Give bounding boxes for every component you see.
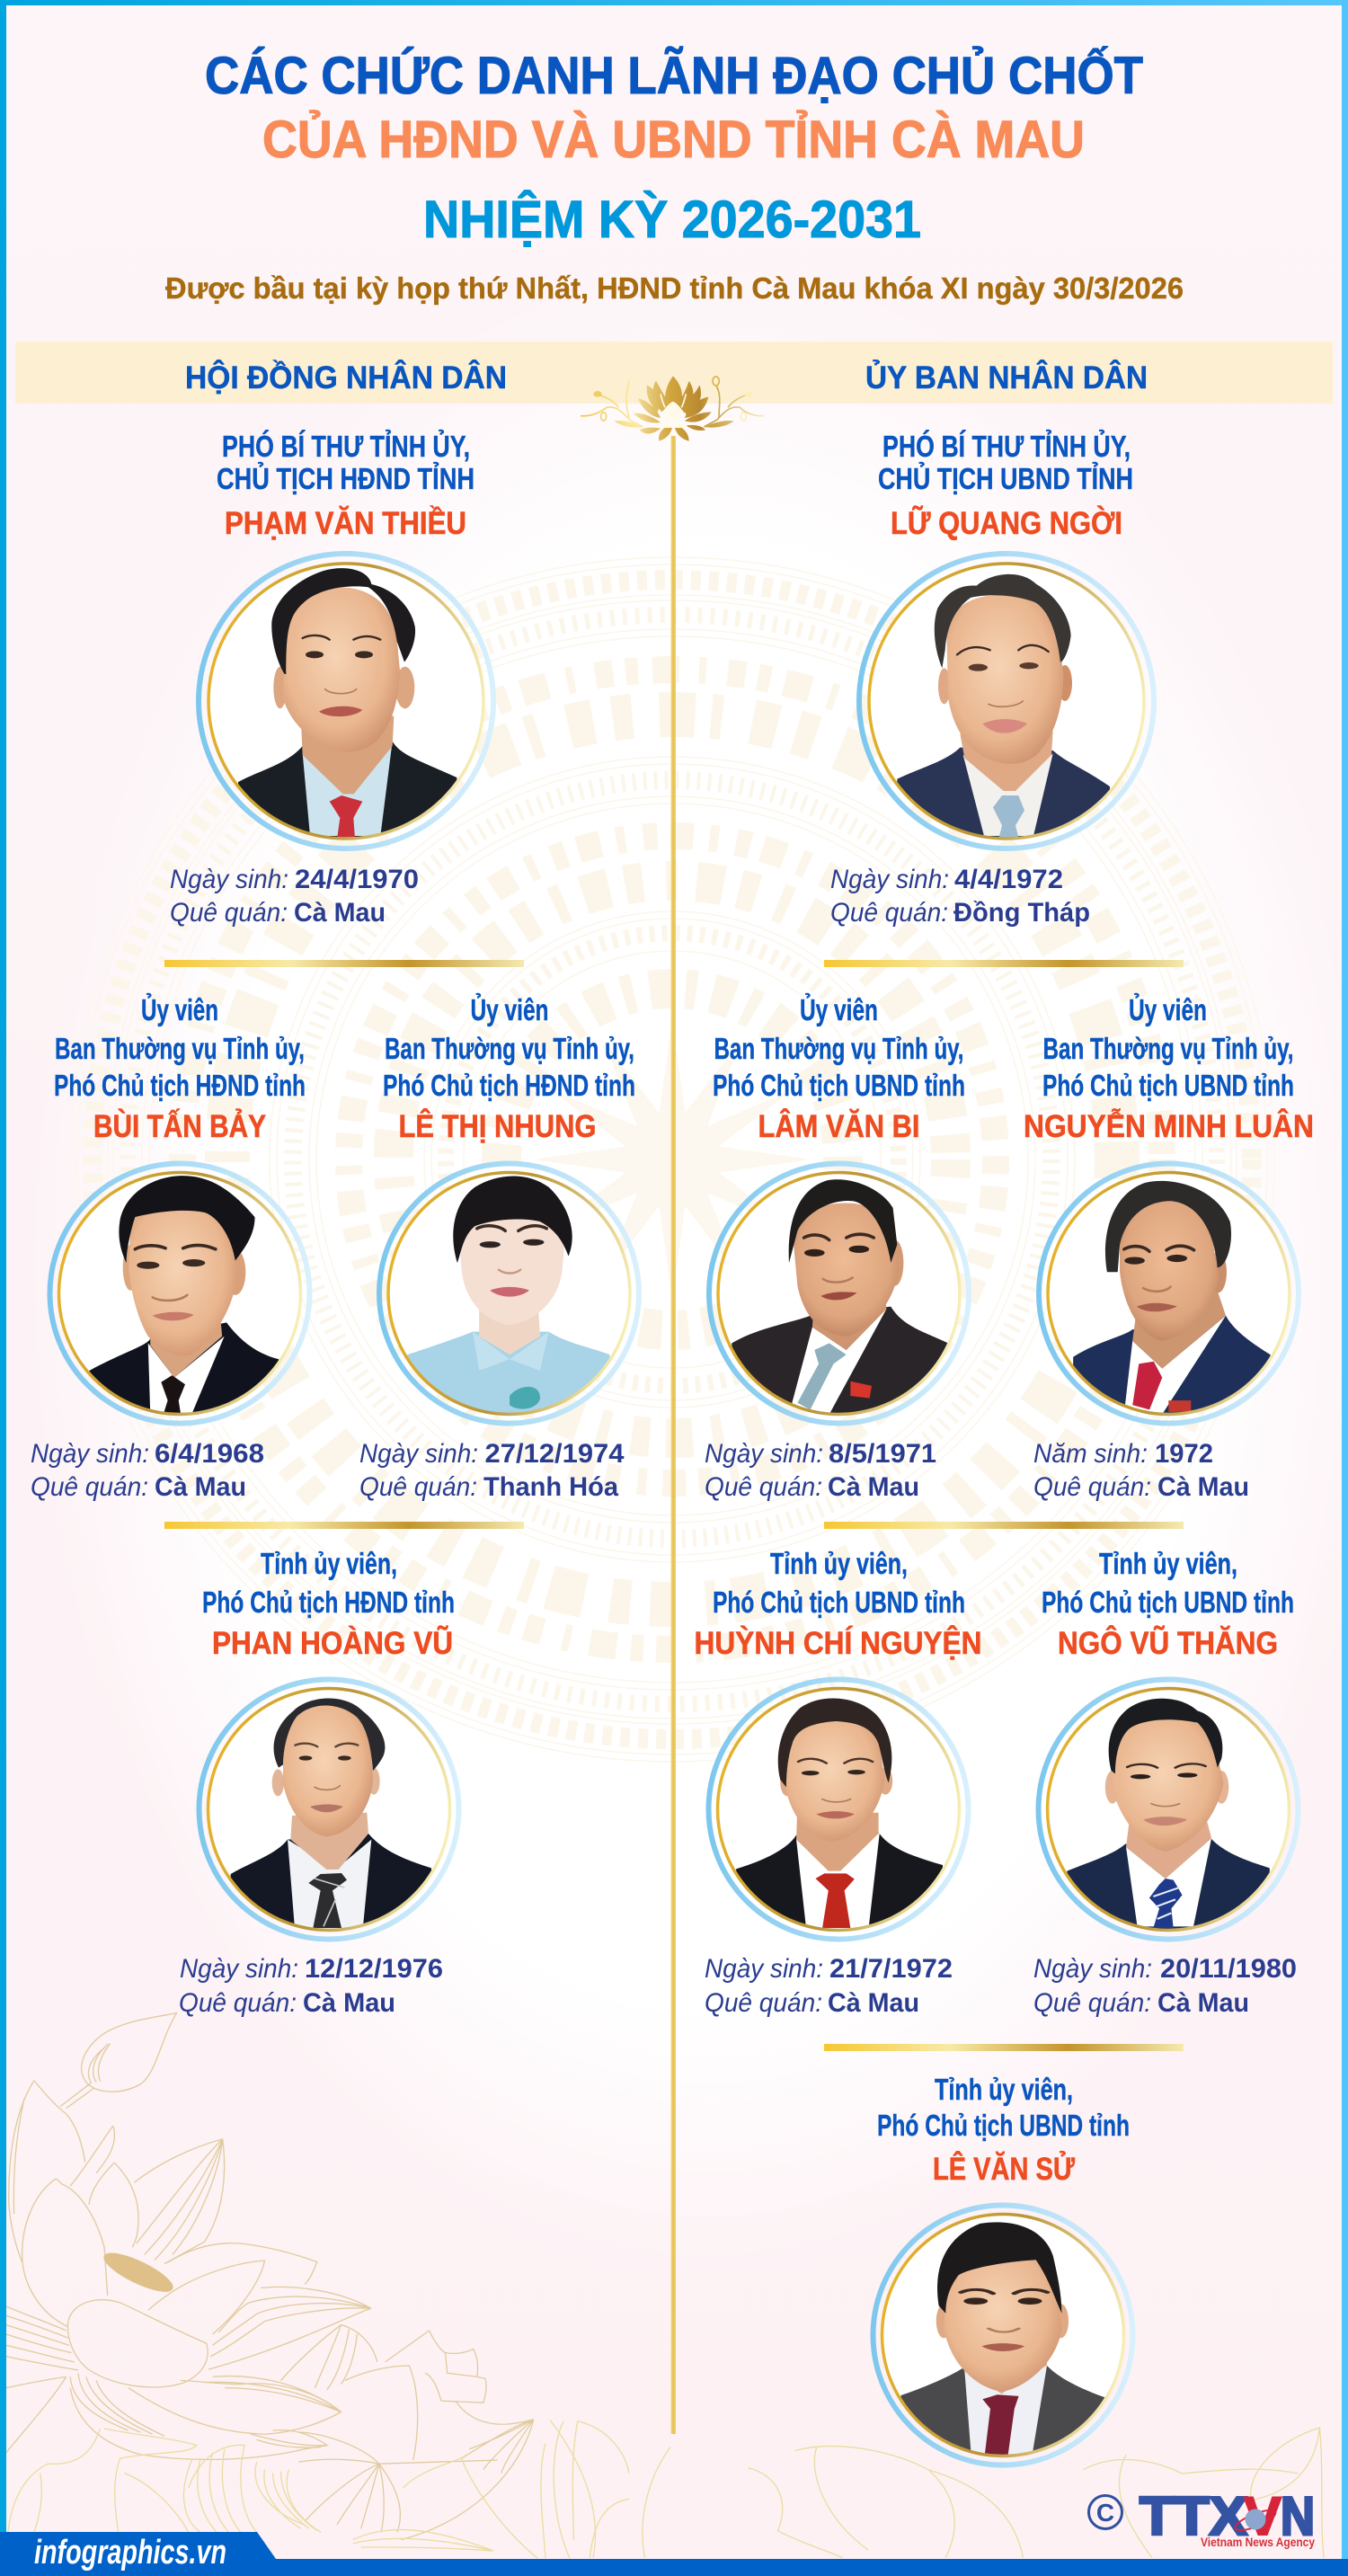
name: LÂM VĂN BI xyxy=(758,1108,920,1144)
birth info: Ngày sinh: xyxy=(180,1954,298,1984)
birth info: Quê quán: xyxy=(705,1472,822,1502)
role xyxy=(1042,1547,1294,1619)
person: Lữ Quang Ngời xyxy=(830,430,1154,928)
birth info xyxy=(705,1439,936,1502)
person: Bùi Tấn Bảy xyxy=(31,993,309,1502)
birth info: Cà Mau xyxy=(828,1988,919,2018)
logo: TTXVN Vietnam News Agency: Vietnam News Agency xyxy=(1201,2535,1315,2549)
birth info: 4/4/1972 xyxy=(954,865,1063,894)
birth info: Quê quán: xyxy=(830,898,948,928)
portrait xyxy=(50,1163,309,1424)
name: PHAN HOÀNG VŨ xyxy=(212,1625,453,1661)
role xyxy=(54,993,306,1102)
lotus line art: bottom-right xyxy=(550,2421,1324,2558)
birth info: Ngày sinh: xyxy=(359,1439,478,1469)
birth info: Quê quán: xyxy=(179,1988,297,2018)
role: Tỉnh ủy viên, xyxy=(770,1547,908,1580)
role xyxy=(383,993,635,1102)
birth info: Đồng Tháp xyxy=(953,898,1090,928)
role: Phó Chủ tịch UBND tỉnh xyxy=(713,1586,965,1619)
birth info xyxy=(830,865,1090,928)
role: Ủy viên xyxy=(471,993,548,1026)
birth info: Quê quán: xyxy=(359,1472,477,1502)
name: BÙI TẤN BẢY xyxy=(93,1108,266,1144)
person: Lê Văn Sử xyxy=(874,2073,1132,2470)
role xyxy=(713,1547,965,1619)
logo: TTXVN Vietnam News Agency: N xyxy=(1281,2486,1315,2546)
birth info xyxy=(31,1439,264,1502)
name: HUỲNH CHÍ NGUYỆN xyxy=(694,1625,981,1661)
birth info: 20/11/1980 xyxy=(1160,1954,1297,1984)
name: PHẠM VĂN THIỀU xyxy=(225,505,466,541)
role: Tỉnh ủy viên, xyxy=(935,2073,1073,2106)
portrait xyxy=(859,554,1154,848)
role: Ban Thường vụ Tỉnh ủy, xyxy=(385,1032,634,1065)
role: CHỦ TỊCH HĐND TỈNH xyxy=(217,462,474,495)
name: LÊ VĂN SỬ xyxy=(933,2151,1076,2187)
birth info: 1972 xyxy=(1155,1439,1213,1469)
birth info: Quê quán: xyxy=(1033,1988,1151,2018)
role: CHỦ TỊCH UBND TỈNH xyxy=(878,462,1133,495)
role: Phó Chủ tịch UBND tỉnh xyxy=(713,1069,965,1102)
birth info: Ngày sinh: xyxy=(705,1954,823,1984)
portrait xyxy=(200,1679,458,1941)
background drum pattern xyxy=(70,557,1274,1762)
central vertical line xyxy=(670,436,676,2434)
birth info: Quê quán: xyxy=(705,1988,822,2018)
birth info: Ngày sinh: xyxy=(170,865,288,894)
portrait xyxy=(379,1163,639,1424)
person: Phạm Văn Thiều xyxy=(170,430,493,928)
birth info: Cà Mau xyxy=(294,898,386,928)
birth info: Ngày sinh: xyxy=(705,1439,823,1469)
title: CÁC CHỨC DANH LÃNH ĐẠO CHỦ CHỐT xyxy=(205,47,1143,105)
name: LỮ QUANG NGỜI xyxy=(891,505,1122,541)
section header band: ỦY BAN NHÂN DÂN xyxy=(865,360,1148,395)
birth info: Quê quán: xyxy=(1033,1472,1151,1502)
portrait xyxy=(199,554,493,848)
lotus line art: bottom band xyxy=(8,2421,629,2558)
person: Lâm Văn Bi xyxy=(705,993,969,1502)
title: NHIỆM KỲ 2026-2031 xyxy=(423,191,921,249)
birth info: Cà Mau xyxy=(1157,1988,1249,2018)
role: Ban Thường vụ Tỉnh ủy, xyxy=(714,1032,963,1065)
gold dividers xyxy=(164,960,1184,2051)
birth info: 24/4/1970 xyxy=(295,865,419,894)
birth info: 6/4/1968 xyxy=(155,1439,264,1469)
birth info xyxy=(179,1954,443,2018)
birth info: Cà Mau xyxy=(303,1988,395,2018)
icon: golden lotus ornament xyxy=(581,376,764,441)
birth info: Quê quán: xyxy=(170,898,288,928)
birth info xyxy=(705,1954,953,2018)
role: PHÓ BÍ THƯ TỈNH ỦY, xyxy=(222,430,470,463)
birth info xyxy=(1033,1439,1249,1502)
logo: TTXVN Vietnam News Agency xyxy=(1089,2486,1315,2549)
birth info: Quê quán: xyxy=(31,1472,148,1502)
role xyxy=(202,1547,455,1619)
title xyxy=(205,47,1143,249)
role: Phó Chủ tịch HĐND tỉnh xyxy=(383,1069,635,1102)
birth info: Ngày sinh: xyxy=(830,865,949,894)
birth info: Cà Mau xyxy=(1157,1472,1249,1502)
section header band xyxy=(15,342,1333,404)
role: Tỉnh ủy viên, xyxy=(1099,1547,1237,1580)
birth info: 12/12/1976 xyxy=(305,1954,443,1984)
birth info xyxy=(170,865,419,928)
birth info: 8/5/1971 xyxy=(829,1439,936,1469)
title: CỦA HĐND VÀ UBND TỈNH CÀ MAU xyxy=(262,111,1085,169)
person: Ngô Vũ Thăng xyxy=(1033,1547,1298,2018)
role xyxy=(877,2073,1130,2142)
logo: TTXVN Vietnam News Agency: V xyxy=(1244,2486,1281,2546)
portrait xyxy=(1039,1163,1299,1424)
birth info: Cà Mau xyxy=(155,1472,246,1502)
lotus line art: bottom-left flower xyxy=(6,2013,534,2540)
birth info: 21/7/1972 xyxy=(829,1954,953,1984)
logo: TTXVN Vietnam News Agency: TTX xyxy=(1140,2486,1247,2546)
portrait xyxy=(708,1679,969,1941)
footer tab: infographics.vn: infographics.vn xyxy=(34,2534,226,2572)
role: Phó Chủ tịch HĐND tỉnh xyxy=(54,1069,306,1102)
section header band: HỘI ĐỒNG NHÂN DÂN xyxy=(185,360,507,395)
person: Huỳnh Chí Nguyện xyxy=(694,1547,981,2018)
role: Ủy viên xyxy=(141,993,218,1026)
role xyxy=(1042,993,1294,1102)
birth info xyxy=(1033,1954,1297,2018)
role xyxy=(217,430,474,495)
birth info: Ngày sinh: xyxy=(31,1439,149,1469)
name: NGÔ VŨ THĂNG xyxy=(1058,1625,1278,1661)
portrait xyxy=(1039,1679,1298,1941)
role xyxy=(713,993,965,1102)
role xyxy=(878,430,1133,495)
birth info: Ngày sinh: xyxy=(1033,1954,1152,1984)
subtitle: Được bầu tại kỳ họp thứ Nhất, HĐND tỉnh Cà Mau khóa XI ngày 30/3/2026 xyxy=(165,271,1184,305)
name: LÊ THỊ NHUNG xyxy=(399,1108,597,1144)
role: Phó Chủ tịch HĐND tỉnh xyxy=(202,1586,455,1619)
role: Phó Chủ tịch UBND tỉnh xyxy=(877,2109,1130,2142)
birth info: Thanh Hóa xyxy=(483,1472,618,1502)
role: Ban Thường vụ Tỉnh ủy, xyxy=(55,1032,305,1065)
birth info: Năm sinh: xyxy=(1033,1439,1148,1469)
role: Ủy viên xyxy=(1129,993,1207,1026)
birth info: Cà Mau xyxy=(828,1472,919,1502)
role: Tỉnh ủy viên, xyxy=(261,1547,397,1580)
portrait xyxy=(709,1163,969,1424)
person: Nguyễn Minh Luân xyxy=(1024,993,1314,1502)
birth info xyxy=(359,1439,625,1502)
person: Phan Hoàng Vũ xyxy=(179,1547,458,2018)
role: Ủy viên xyxy=(800,993,878,1026)
logo: TTXVN Vietnam News Agency: C xyxy=(1096,2499,1114,2527)
portrait xyxy=(874,2206,1132,2470)
role: PHÓ BÍ THƯ TỈNH ỦY, xyxy=(882,430,1131,463)
name: NGUYỄN MINH LUÂN xyxy=(1024,1108,1314,1144)
person: Lê Thị Nhung xyxy=(359,993,639,1502)
birth info: 27/12/1974 xyxy=(485,1439,625,1469)
